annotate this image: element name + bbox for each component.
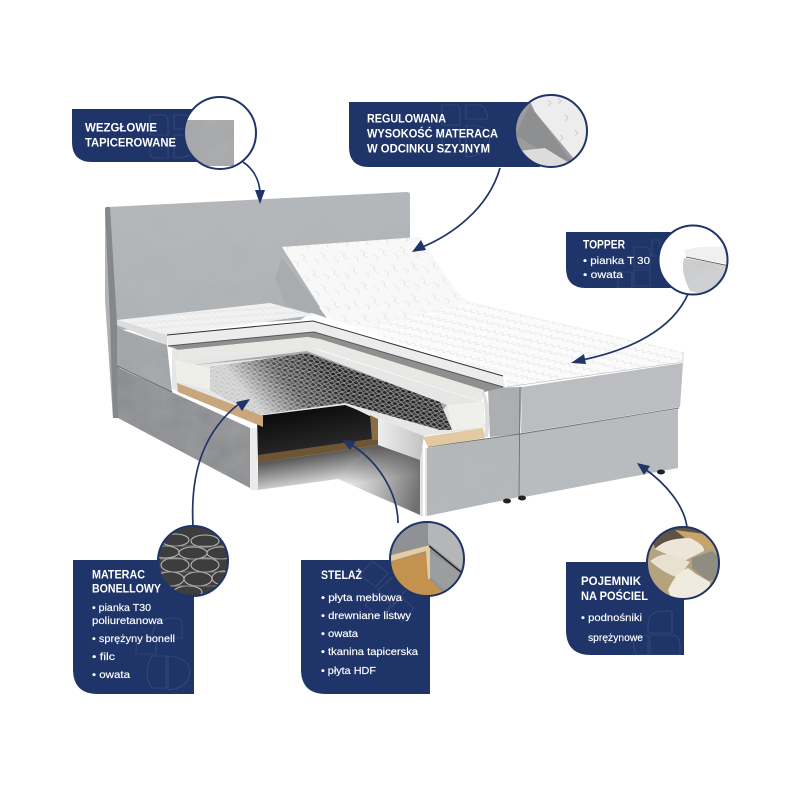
circle: springs — [157, 525, 229, 597]
text block: MATERAC — [92, 569, 145, 581]
text block: BONELLOWY — [92, 584, 161, 596]
right base panels — [420, 363, 683, 516]
text block — [92, 569, 175, 681]
heading: WEZGŁOWIE — [85, 122, 157, 134]
panel: headboard callout — [72, 97, 265, 204]
spring unit — [178, 347, 484, 436]
text block: • pianka T 30 — [583, 255, 650, 267]
headboard — [105, 192, 410, 418]
circle: pillows — [647, 525, 720, 600]
arrow to storage — [637, 463, 687, 527]
circle: wood frame — [388, 522, 468, 600]
watermark logo — [150, 115, 192, 158]
panel background — [566, 232, 680, 288]
text block: • płyta meblowa — [321, 592, 402, 604]
circle: headboard fabric — [180, 97, 256, 169]
wedge under raised topper — [275, 258, 327, 318]
heading — [85, 122, 176, 150]
arrow to raised mattress — [412, 168, 500, 252]
text block: • drewniane listwy — [321, 610, 412, 622]
text block: sprężynowe — [588, 632, 643, 644]
panel background — [72, 109, 215, 162]
panel: bedding storage callout — [566, 463, 720, 655]
wooden strips — [177, 383, 485, 447]
text block — [321, 569, 418, 677]
base panels left — [117, 328, 250, 488]
raised topper — [282, 237, 683, 387]
heading: W ODCINKU SZYJNYM — [367, 143, 490, 155]
storage box interior — [250, 404, 424, 515]
arrow to headboard — [243, 162, 265, 204]
foam blocks — [175, 360, 489, 437]
heading: REGULOWANA — [367, 114, 446, 126]
arrow to frame — [342, 440, 398, 523]
watermark logo — [618, 240, 660, 288]
text block: STELAŻ — [321, 569, 362, 582]
heading: WYSOKOŚĆ MATERACA — [367, 127, 498, 140]
circle: raised mattress — [516, 94, 588, 168]
panel background — [73, 560, 194, 694]
text block: poliuretanowa — [92, 615, 163, 627]
watermark logo — [442, 105, 490, 157]
text block: • płyta HDF — [321, 665, 376, 677]
panel: topper callout — [566, 226, 730, 364]
panel: adjustable height callout — [349, 90, 600, 252]
text block: POJEMNIK — [581, 576, 642, 588]
arrow to springs — [193, 399, 250, 526]
panel background — [566, 562, 684, 655]
text block: • owata — [583, 269, 623, 281]
bed cross-section illustration — [105, 192, 683, 516]
text block: TOPPER — [583, 239, 626, 251]
text block: • tkanina tapicerska — [321, 646, 418, 658]
panel background — [349, 102, 540, 167]
mattress cut layers — [167, 321, 505, 412]
arrow to topper — [571, 294, 688, 364]
heading: TAPICEROWANE — [85, 138, 176, 150]
panel: bonnell mattress callout — [73, 399, 250, 694]
watermark logo — [360, 561, 414, 622]
text block: • owata — [92, 669, 130, 681]
text block — [581, 576, 648, 644]
circle: topper corner — [658, 226, 730, 295]
text block: NA POŚCIEL — [581, 590, 648, 603]
bed feet — [503, 470, 665, 504]
text block: • podnośniki — [581, 612, 642, 624]
left topper — [117, 303, 315, 345]
text block: • sprężyny bonell — [92, 633, 175, 645]
text block: • owata — [321, 628, 358, 640]
text block: • filc — [92, 651, 115, 663]
panel background — [301, 560, 430, 694]
panel: frame callout — [301, 440, 468, 694]
text block — [583, 239, 650, 281]
watermark logo — [136, 618, 190, 690]
text block: • pianka T30 — [92, 602, 151, 614]
heading — [367, 114, 498, 155]
watermark logo — [634, 611, 680, 655]
